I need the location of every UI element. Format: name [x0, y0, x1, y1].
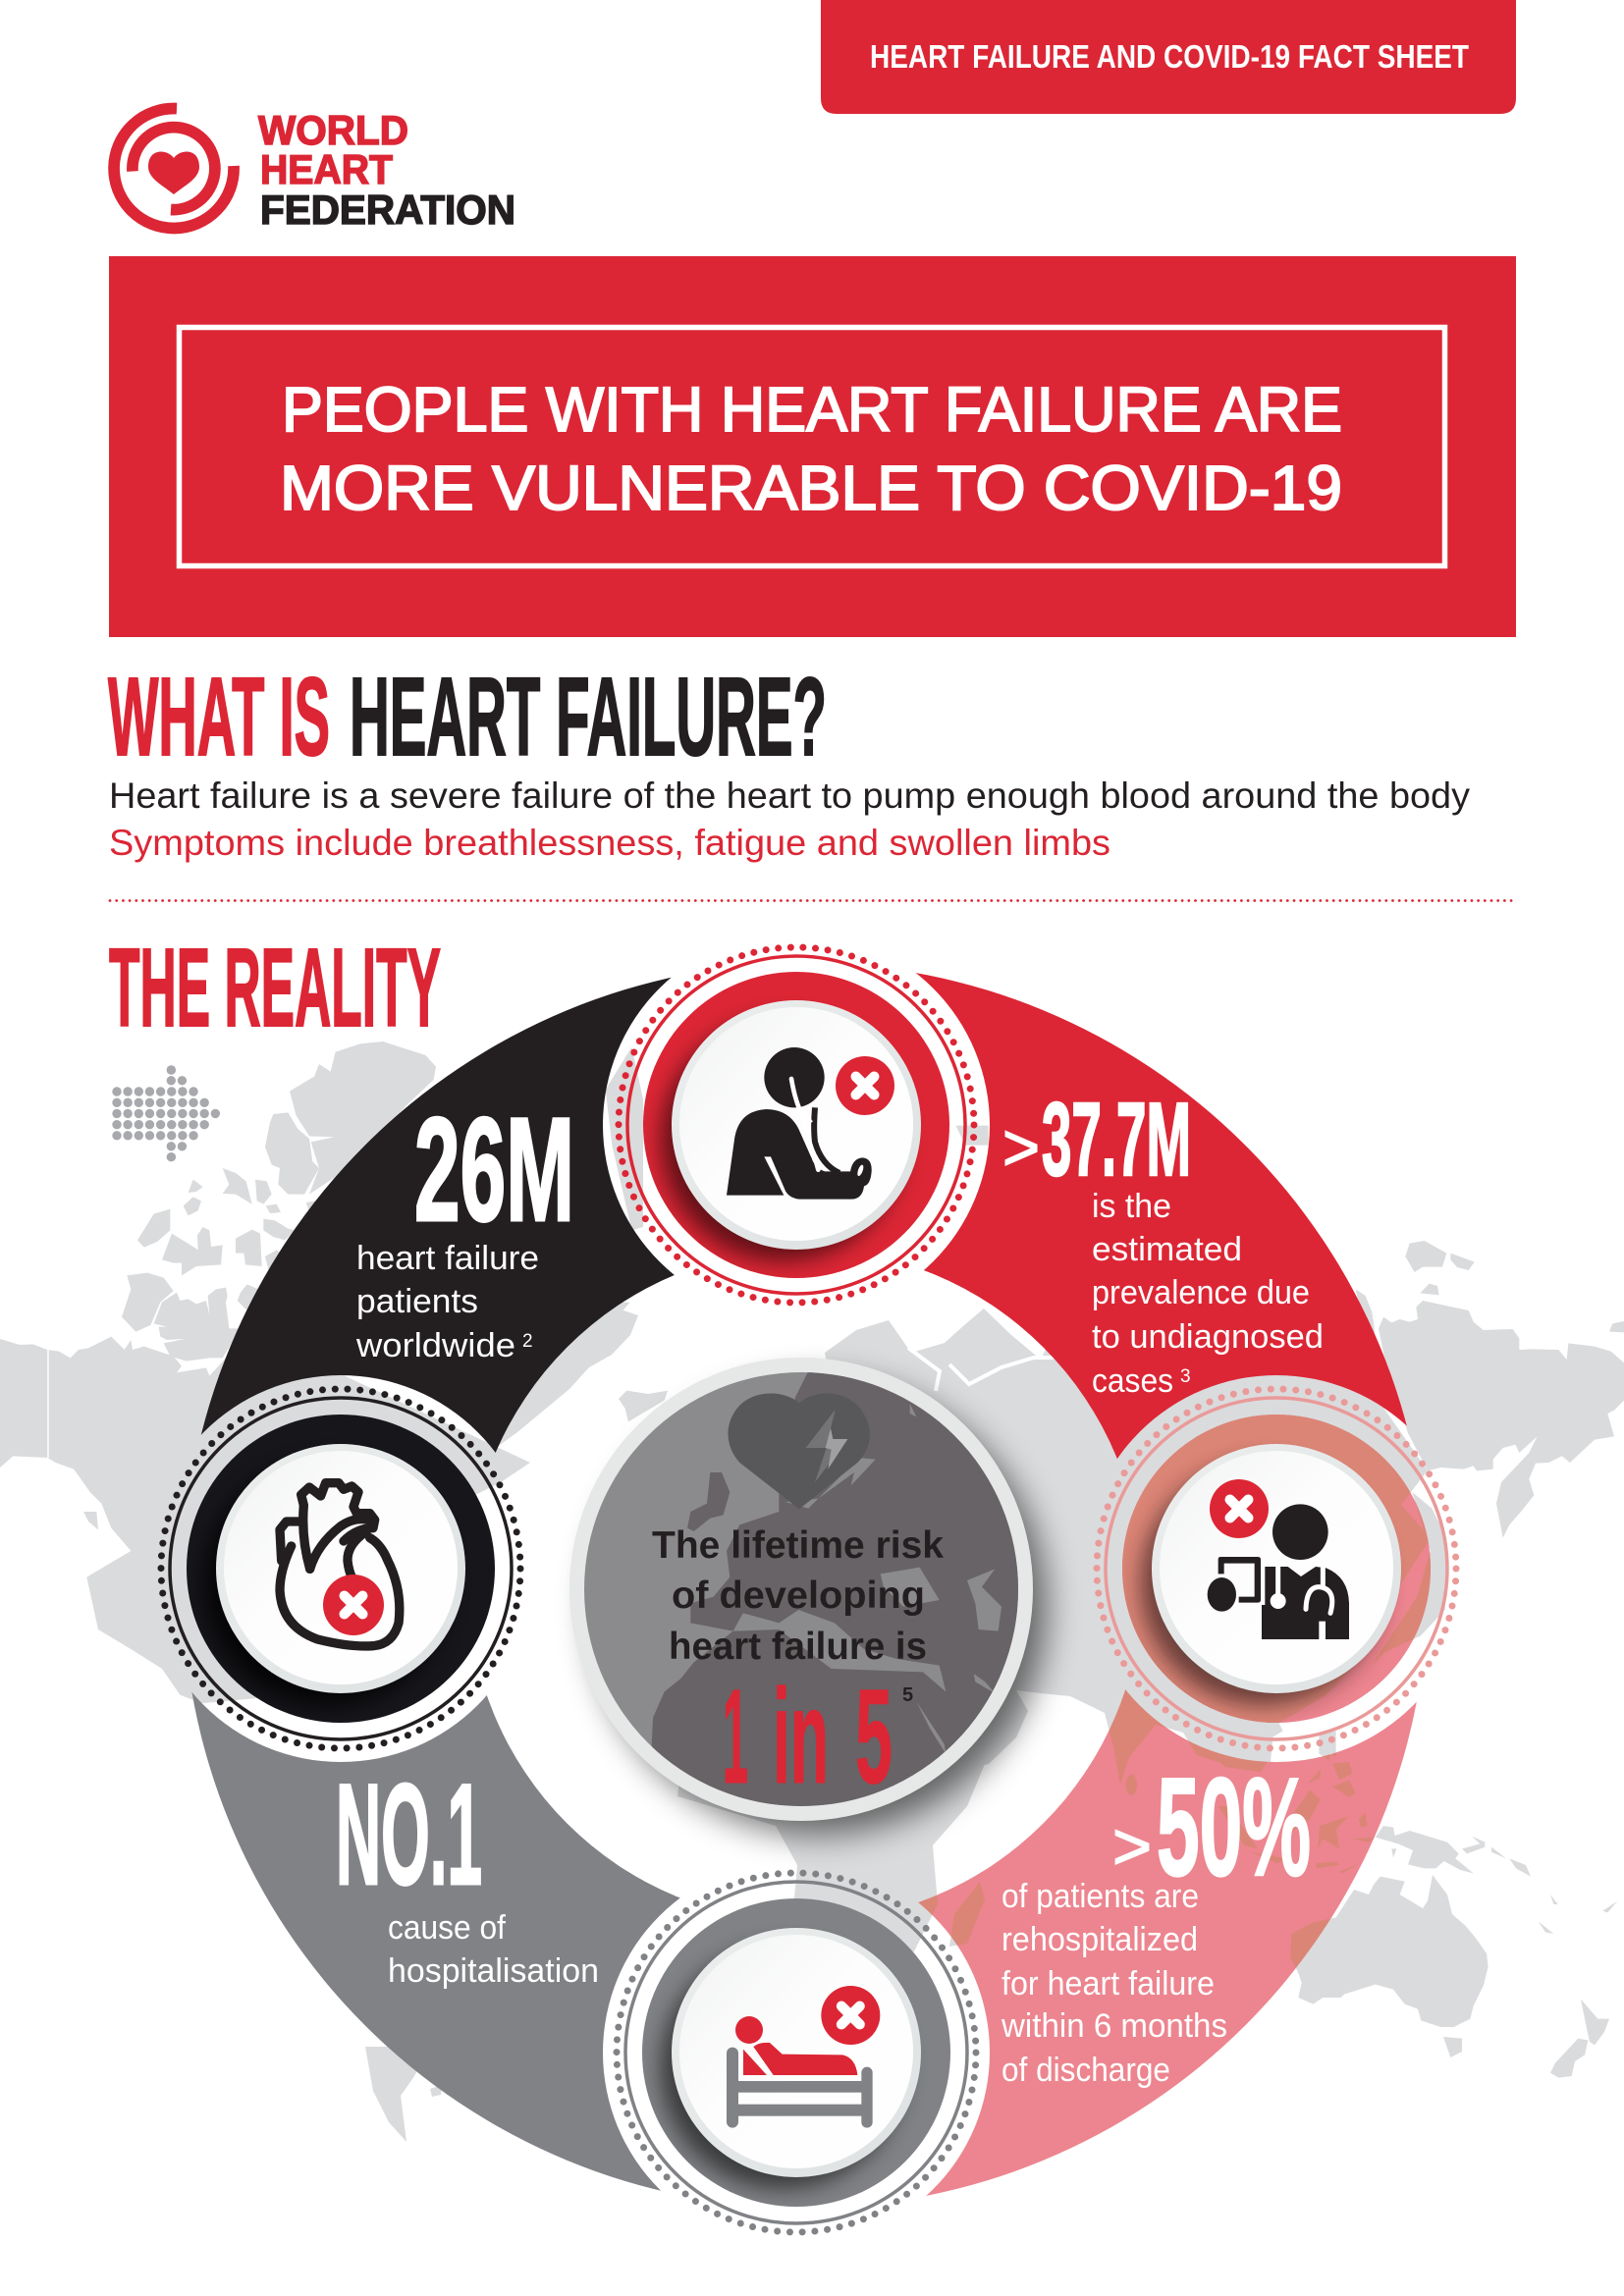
panel: number one cause: [336, 1754, 599, 1990]
stat: 1 in 5: 1: [723, 1662, 748, 1812]
panel: 26M patients: patients: [356, 1283, 478, 1320]
segment: red, top right: [915, 973, 1407, 1459]
panel: over 50 percent rehospitalized: for heart failure: [1001, 1965, 1215, 2002]
definition text: Heart failure is a severe failure of the heart to pump enough blood around the body: [109, 775, 1470, 816]
panel: number one cause: NO.1: [336, 1754, 482, 1914]
icon: doctor with tablet: [1208, 1479, 1349, 1639]
panel: over 50 percent rehospitalized: rehospitalized: [1001, 1921, 1198, 1958]
panel: 26M patients: heart failure: [356, 1240, 539, 1277]
map inside disc: [648, 1367, 1028, 1826]
logo: World Heart Federation: [114, 107, 515, 233]
text: lifetime risk: heart failure is: [669, 1626, 927, 1668]
title banner: MORE VULNERABLE TO COVID-19: [280, 453, 1342, 523]
title banner: PEOPLE WITH HEART FAILURE ARE: [282, 374, 1342, 445]
definition text: [109, 775, 1470, 863]
text: HEART FAILURE?: [350, 655, 827, 778]
panel: number one cause: hospitalisation: [388, 1952, 599, 1990]
definition text: Symptoms include breathlessness, fatigue and swollen limbs: [109, 823, 1110, 863]
icon: dotted arrow: [117, 1070, 216, 1157]
panel: over 50 percent rehospitalized: 50%: [1157, 1749, 1311, 1905]
text: THE REALITY: [109, 926, 441, 1049]
icon: red cross mark: [1210, 1479, 1269, 1538]
text: lifetime risk: of developing: [672, 1575, 925, 1617]
logo wordmark: HEART: [260, 146, 393, 192]
panel: over 50 percent rehospitalized: of patients are: [1001, 1878, 1199, 1915]
panel: over 50 percent rehospitalized: of discharge: [1001, 2052, 1170, 2089]
heading: what is heart failure: [108, 655, 827, 778]
badge: heart with cross: [161, 1389, 520, 1748]
panel: 37.7M prevalence: [1002, 1082, 1324, 1400]
title banner: [109, 256, 1516, 637]
icon: anatomical heart: [280, 1483, 400, 1646]
panel: 37.7M prevalence: >: [1002, 1110, 1040, 1185]
ring segments: [191, 973, 1417, 2196]
text: lifetime risk: The lifetime risk: [652, 1524, 944, 1567]
panel: number one cause: cause of: [388, 1909, 507, 1947]
world map background: [0, 1041, 1624, 2142]
stat: 1 in 5: in: [773, 1662, 829, 1812]
badge: hospital bed: [617, 1873, 976, 2232]
center circle: lifetime risk: 5: [902, 1684, 913, 1706]
icon: patient being examined: [727, 1047, 894, 1200]
panel: 37.7M prevalence: is the: [1092, 1188, 1171, 1225]
logo wordmark: [258, 107, 515, 233]
icon: patient in bed: [727, 1986, 880, 2128]
segment: grey, bottom left: [183, 1569, 800, 2208]
icon: red cross mark: [836, 1056, 894, 1115]
panel: 37.7M prevalence: to undiagnosed: [1092, 1318, 1324, 1356]
badge: doctor: [1094, 1386, 1459, 1751]
header tab: fact sheet label: [821, 0, 1516, 114]
panel: 37.7M prevalence: 3: [1180, 1366, 1191, 1387]
panel: 26M patients: 26M: [414, 1087, 574, 1252]
center circle: lifetime risk: 5: [855, 1662, 893, 1812]
panel: 26M patients: [355, 1087, 574, 1364]
panel: over 50 percent rehospitalized: within 6 months: [1001, 2007, 1227, 2045]
segment: pink, bottom right with map showing through: [918, 1689, 1417, 2196]
panel: 37.7M prevalence: 37.7M: [1042, 1082, 1191, 1198]
panel: 26M patients: 2: [522, 1331, 533, 1352]
logo wordmark: FEDERATION: [260, 187, 515, 233]
panel: over 50 percent rehospitalized: >: [1112, 1809, 1152, 1884]
text: lifetime risk: [652, 1524, 944, 1668]
icon: heart with lightning bolt: [728, 1393, 870, 1509]
icon: red cross mark: [323, 1575, 384, 1635]
heading: what is heart failure: WHAT IS: [108, 655, 330, 778]
icon: red cross mark: [821, 1986, 880, 2045]
badge: patient with stethoscope: [619, 947, 974, 1303]
panel: over 50 percent rehospitalized: [1001, 1749, 1311, 2089]
panel: 37.7M prevalence: cases: [1092, 1362, 1173, 1400]
segment: black, top left: [200, 978, 675, 1453]
panel: 37.7M prevalence: estimated: [1092, 1231, 1242, 1268]
header tab: fact sheet label: HEART FAILURE AND COVID-19 FACT SHEET: [870, 38, 1469, 75]
panel: 26M patients: worldwide: [355, 1327, 515, 1364]
logo wordmark: WORLD: [258, 107, 408, 153]
icon: logo rings and heart: [114, 109, 234, 229]
center circle: lifetime risk: [569, 1358, 1047, 1835]
panel: 37.7M prevalence: prevalence due: [1092, 1274, 1310, 1311]
